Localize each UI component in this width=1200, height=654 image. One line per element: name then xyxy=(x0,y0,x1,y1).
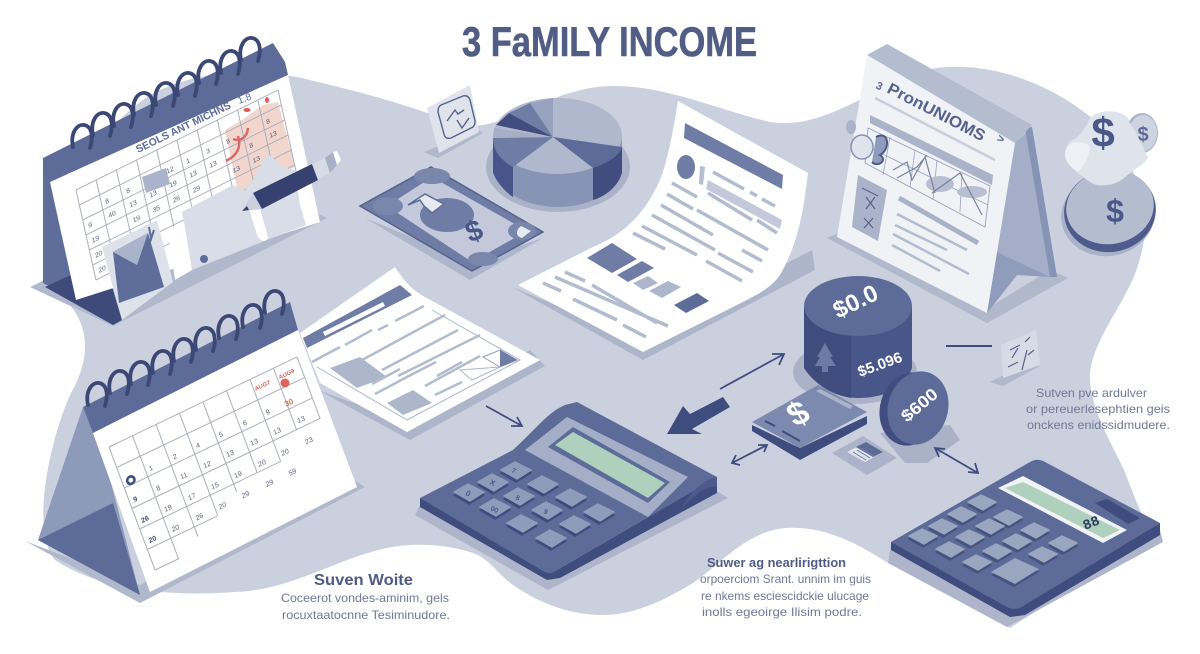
calendar grid and dates: 12 xyxy=(203,460,212,470)
arrows xyxy=(486,346,992,473)
calendar grid and dates: 23 xyxy=(304,436,314,446)
binder strip xyxy=(83,302,298,433)
binder rings xyxy=(87,291,284,406)
banknote: $ xyxy=(461,214,488,250)
calendar grid and dates: 26 xyxy=(140,515,150,525)
big coin xyxy=(1055,163,1162,264)
calendar grid and dates: 13 xyxy=(273,427,282,437)
calendar grid: 8 xyxy=(249,142,254,150)
calendar grid: 13 xyxy=(269,130,278,140)
cash stack: $ xyxy=(780,394,817,434)
text lines xyxy=(633,172,777,281)
keypad: 00 xyxy=(489,505,499,515)
money bag: $ xyxy=(1091,109,1115,156)
cash stack xyxy=(752,385,867,460)
calendar grid: 29 xyxy=(192,185,201,195)
calendar grid and dates: 19 xyxy=(163,504,173,514)
pie chart xyxy=(486,98,630,212)
calendar: top left: 1.8 xyxy=(236,92,254,107)
calendar grid: 20 xyxy=(95,250,103,260)
text block: left bottom: rocuxtaatocnne Tesiminudore. xyxy=(282,608,450,622)
calendar grid: 12 xyxy=(166,166,175,176)
text block: left bottom xyxy=(281,572,450,622)
calendar grid: 8 xyxy=(105,198,110,206)
keypad: X xyxy=(488,478,497,488)
calendar grid: 40 xyxy=(108,210,117,220)
calendar grid and dates: 9 xyxy=(265,409,271,417)
pink highlighted cells xyxy=(225,102,295,193)
calendar grid: 35 xyxy=(152,205,161,215)
calendar grid and dates: 13 xyxy=(226,449,235,459)
small note card xyxy=(990,330,1040,386)
overlapping pale sheet xyxy=(182,153,306,270)
cylinder coin stack: $5.096 xyxy=(856,349,905,381)
calendar grid: 8 xyxy=(126,187,131,196)
text block: center bottom: inolls egeoirge Ilisim podre. xyxy=(702,605,862,619)
calendar grid: 9 xyxy=(88,222,93,230)
text block: center bottom: orpoerciom Srant. unnim im guis xyxy=(700,572,871,586)
calendar grid: 19 xyxy=(169,180,178,190)
calendar grid: 13 xyxy=(149,190,158,200)
calendar grid and dates xyxy=(109,357,343,570)
bar blocks xyxy=(587,243,637,273)
calendar: top left xyxy=(30,38,341,326)
calendar grid and dates: 20 xyxy=(280,448,290,458)
binder rings xyxy=(72,38,260,148)
text block: right: or pereuerlesephtien geis xyxy=(1026,402,1170,416)
calendar grid and dates: 5 xyxy=(218,431,224,439)
icon: small card xyxy=(424,85,483,158)
calendar grid and dates: 13 xyxy=(250,438,259,448)
keypad: 7 xyxy=(510,467,517,476)
main report document xyxy=(512,101,815,360)
calendar grid and dates: 59 xyxy=(288,468,298,478)
form document: behind lower calendar xyxy=(300,267,545,440)
calendar grid and dates: 20 xyxy=(257,459,267,469)
calendar title: SEOLS ANT MICHNS xyxy=(134,100,233,156)
calendar grid and dates: 9 xyxy=(133,496,139,504)
arrow to calculator from form xyxy=(486,406,522,426)
standing coin xyxy=(871,364,960,463)
calendar grid and dates: 13 xyxy=(297,415,306,425)
calculator: center xyxy=(415,402,728,590)
calendar grid and dates: 6 xyxy=(242,420,248,428)
money bag: $ xyxy=(1137,124,1149,146)
text block: right xyxy=(1026,386,1170,432)
small receipt chip xyxy=(832,436,897,475)
calendar grid: 19 xyxy=(91,235,100,245)
big coin: $ xyxy=(1106,193,1124,229)
red mark xyxy=(226,128,248,161)
display xyxy=(998,476,1127,543)
tree icon xyxy=(815,343,836,372)
stand heading: 3 xyxy=(874,80,884,93)
text block: right: Sutven pve ardulver xyxy=(1036,386,1147,400)
money bag xyxy=(1065,109,1158,185)
connector line xyxy=(946,345,992,347)
keypad: 8 xyxy=(514,494,521,503)
calendar grid: 1 xyxy=(186,158,191,166)
calendar grid and dates: 11 xyxy=(180,472,189,481)
display panel xyxy=(525,417,688,517)
title: 3 FaMILY INCOME xyxy=(462,18,757,65)
calendar grid: 3 xyxy=(206,148,211,156)
envelope card xyxy=(102,220,173,320)
paper clip icon xyxy=(846,120,887,164)
calendar grid: 13 xyxy=(232,165,241,175)
report stand: top right: > xyxy=(995,131,1007,147)
calendar grid and dates: 1 xyxy=(148,465,154,473)
text block: left bottom: Suven Woite xyxy=(314,572,413,589)
calendar grid and dates: AUG7 xyxy=(254,380,272,393)
double arrow: coin to calculator xyxy=(935,448,978,473)
calculator: right xyxy=(888,460,1163,627)
calendar grid and dates: 20 xyxy=(171,524,181,534)
calendar grid: 19 xyxy=(146,176,155,186)
calendar grid and dates: 20 xyxy=(148,535,158,545)
calendar grid and dates: 20 xyxy=(218,501,228,511)
calendar grid and dates: AUG9 xyxy=(278,368,296,381)
text block: right: onckens enidssidmudere. xyxy=(1027,418,1170,432)
X card xyxy=(852,175,887,241)
double arrow: cash xyxy=(732,445,767,465)
text block: left bottom: Coceerot vondes-aminim, gels xyxy=(281,591,449,605)
background blob xyxy=(43,67,1155,628)
calendar grid and dates: 8 xyxy=(156,485,162,493)
line chart xyxy=(865,128,990,227)
calendar grid: 20 xyxy=(98,265,107,275)
banknote xyxy=(360,167,543,280)
calendar grid: 13 xyxy=(129,199,138,210)
calendar grid and dates: 17 xyxy=(187,492,197,502)
calendar grid and dates: 4 xyxy=(195,442,201,450)
calendar grid: 13 xyxy=(189,170,198,180)
calendar grid xyxy=(76,90,298,280)
calendar grid and dates: 2 xyxy=(172,453,178,461)
calendar: bottom left xyxy=(25,291,365,603)
calendar grid: 19 xyxy=(132,214,141,225)
report stand: top right xyxy=(827,44,1068,323)
calendar grid and dates: 26 xyxy=(195,512,205,522)
report stand: top right: PronUNIOMS xyxy=(884,80,988,145)
calendar grid: 26 xyxy=(172,195,181,205)
header band xyxy=(684,123,783,189)
calculator: right: 88 xyxy=(1081,514,1102,535)
pen xyxy=(242,151,341,211)
calendar grid: 13 xyxy=(209,160,218,170)
coins: top right xyxy=(1055,109,1162,264)
arrow to cylinder xyxy=(720,354,784,389)
arrow to left calculator xyxy=(667,397,730,434)
keypad xyxy=(909,495,1077,587)
calendar grid and dates: 15 xyxy=(210,481,220,491)
calendar grid and dates: 19 xyxy=(233,470,243,480)
text block: center bottom xyxy=(700,555,871,619)
keypad: 9 xyxy=(542,508,549,517)
calendar grid and dates: 29 xyxy=(241,490,251,500)
text block: center bottom: Suwer ag nearlirigttion xyxy=(707,555,846,570)
calendar grid: 8 xyxy=(226,138,231,146)
cylinder coin stack xyxy=(793,276,917,404)
binder strip xyxy=(43,43,288,182)
calendar grid: 13 xyxy=(252,155,261,165)
calendar grid and dates: 29 xyxy=(265,479,275,489)
keypad xyxy=(454,462,614,550)
calendar grid: 8 xyxy=(266,118,271,126)
calendar: bottom left: 30 xyxy=(283,397,295,409)
text block: center bottom: re nkems esciescidckie ulucage xyxy=(701,589,869,603)
standing coin: $600 xyxy=(897,385,942,426)
keypad: 0 xyxy=(464,489,472,499)
cylinder coin stack: $0.0 xyxy=(829,280,883,324)
